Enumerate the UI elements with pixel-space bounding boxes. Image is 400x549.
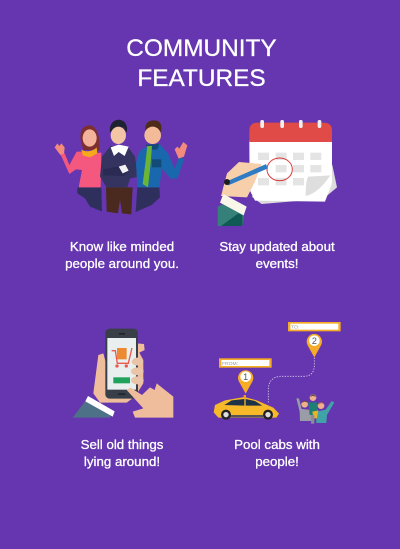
label box: to: TO: — [291, 325, 299, 331]
caption: stay updated: events! — [256, 256, 298, 270]
group of people — [296, 394, 334, 424]
caption: sell old things — [81, 437, 164, 469]
caption: pool cabs: Pool cabs with — [234, 437, 320, 452]
icon: hands holding phone with shopping cart — [73, 329, 173, 418]
pin 2: 2 — [312, 336, 317, 346]
taxi — [214, 395, 279, 420]
caption: sell old things: Sell old things — [81, 437, 163, 452]
caption: know like minded people — [65, 239, 179, 271]
caption: know like minded people: people around you. — [65, 256, 179, 270]
title: COMMUNITY — [126, 35, 277, 62]
caption: pool cabs — [234, 437, 320, 469]
icon: three people waving — [55, 120, 187, 214]
title — [126, 35, 277, 92]
caption: sell old things: lying around! — [84, 454, 160, 468]
icon: calendar with hand circling a date — [218, 120, 337, 226]
title: FEATURES — [137, 65, 266, 92]
caption: pool cabs: people! — [255, 454, 299, 468]
label box: from: FROM: — [222, 361, 238, 367]
caption: know like minded people: Know like minded — [70, 239, 174, 254]
caption: stay updated: Stay updated about — [219, 239, 335, 254]
pin 1: 1 — [243, 372, 248, 382]
icon: taxi route with two pins and group of people — [214, 322, 341, 424]
caption: stay updated — [219, 239, 335, 270]
